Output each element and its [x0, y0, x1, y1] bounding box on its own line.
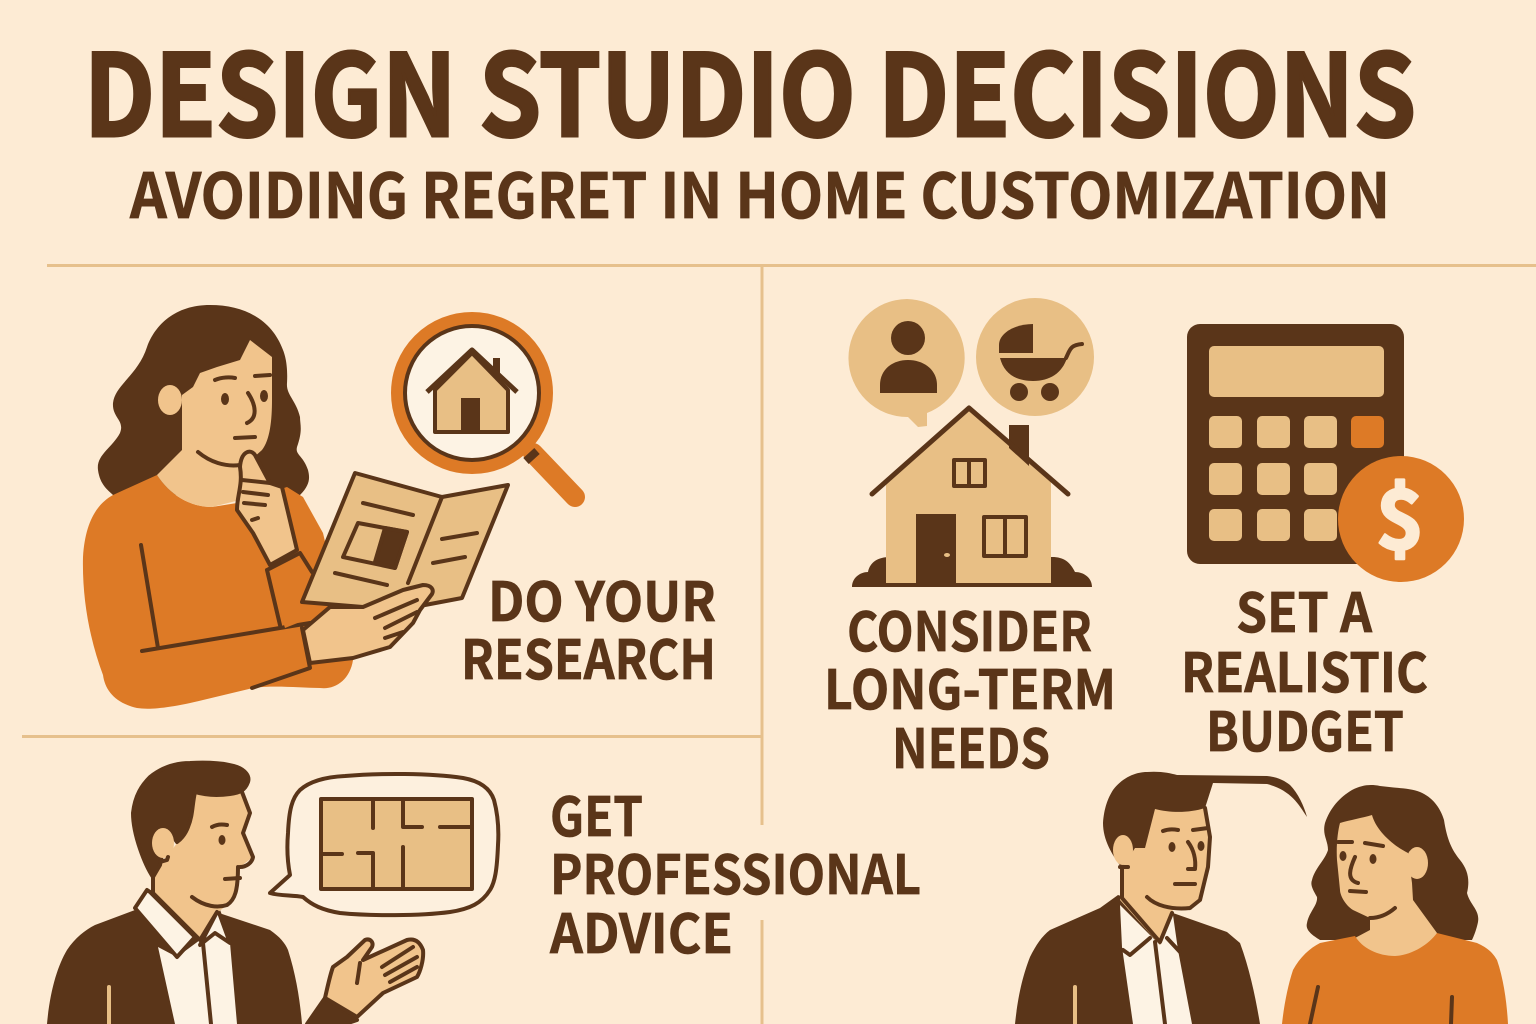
icon: house [852, 408, 1092, 587]
label: set a realistic budget: BUDGET [1206, 688, 1404, 767]
label: set a realistic budget [1181, 569, 1428, 767]
label: get professional advice [549, 773, 921, 969]
label: consider long-term needs: NEEDS [892, 705, 1050, 784]
panel: set a realistic budget [1181, 324, 1464, 767]
label: consider long-term needs: LONG-TERM [824, 646, 1116, 725]
label: do your research: DO YOUR [488, 558, 716, 637]
panel: consider long-term needs [824, 298, 1116, 784]
panel: couple consulting [1015, 772, 1508, 1024]
icon: woman reading brochure [83, 305, 508, 709]
label: do your research [461, 558, 716, 695]
icon: woman listening [1282, 785, 1508, 1024]
label: get professional advice: ADVICE [549, 890, 733, 969]
label: set a realistic budget: SET A [1236, 569, 1372, 648]
icon: person bubble [848, 299, 965, 427]
label: consider long-term needs: CONSIDER [847, 588, 1092, 667]
icon: man in suit [1015, 772, 1307, 1024]
icon: magnifying glass with house [398, 319, 575, 497]
label: consider long-term needs [824, 588, 1116, 784]
icon: speech bubble with floor plan [270, 774, 498, 915]
subtitle: AVOIDING REGRET IN HOME CUSTOMIZATION [129, 146, 1390, 236]
icon: calculator [1187, 324, 1404, 564]
icon: man with suit [47, 763, 423, 1024]
icon: dollar coin [1338, 454, 1464, 582]
panel: do your research [83, 305, 716, 709]
icon: dollar coin: $ [1376, 454, 1424, 573]
label: get professional advice: GET [550, 773, 643, 852]
label: get professional advice: PROFESSIONAL [550, 831, 921, 910]
label: do your research: RESEARCH [461, 616, 716, 695]
icon: stroller bubble [976, 298, 1094, 416]
panel: get professional advice [47, 763, 921, 1024]
label: set a realistic budget: REALISTIC [1181, 629, 1428, 708]
